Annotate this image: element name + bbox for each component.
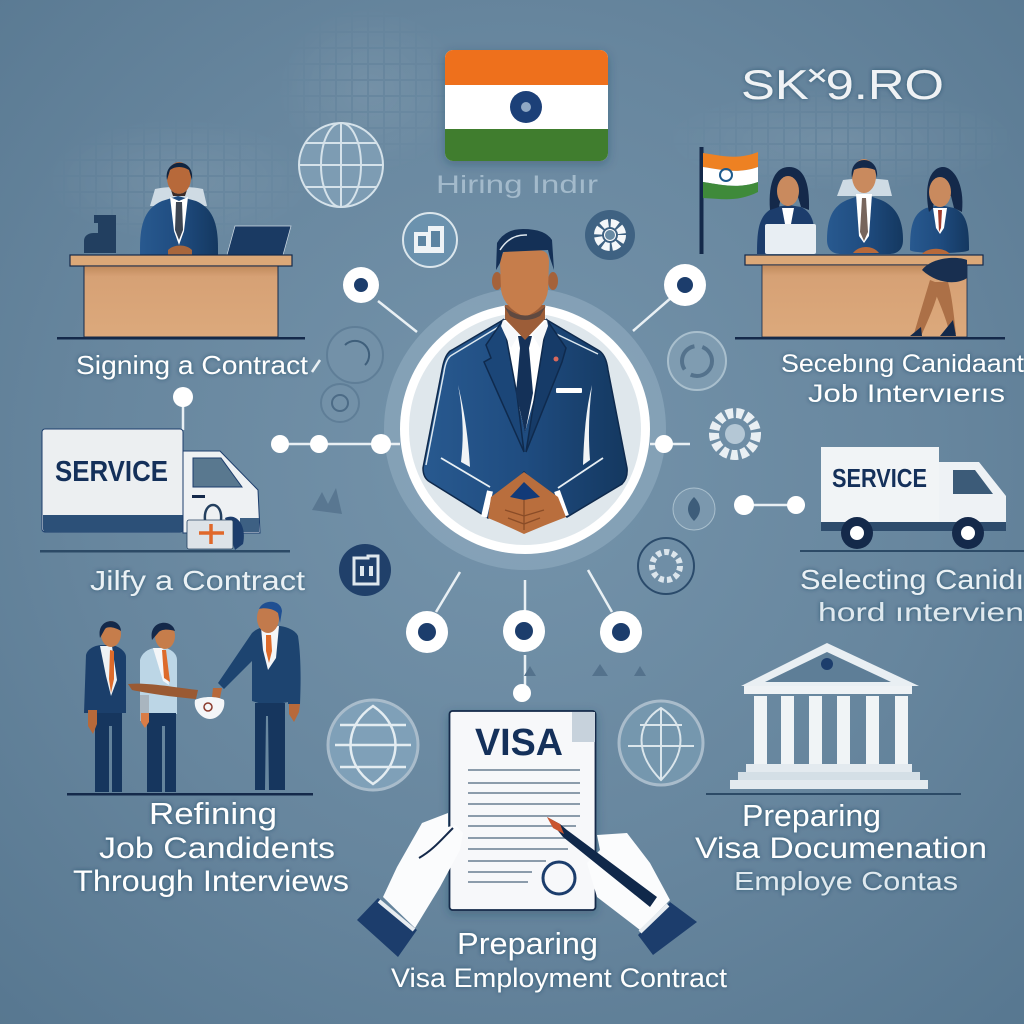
label: preparing visa contract: Visa Employment Contract — [391, 963, 728, 993]
seal — [543, 862, 575, 894]
node: small dots — [173, 387, 805, 702]
laptop — [227, 226, 291, 255]
icon: faded circles left — [321, 327, 383, 422]
label: refining job candidates: Job Candidents — [99, 832, 335, 865]
label: jilfy a contract: Jilfy a Contract — [90, 565, 305, 596]
brand logo text: SK˟9.RO — [741, 61, 944, 108]
label: selecting candidate job interviews: Job Intervıerıs — [808, 380, 1005, 408]
label: refining job candidates — [73, 796, 349, 898]
label: preparing visa contract: Preparing — [457, 926, 598, 961]
node circles — [173, 264, 805, 702]
icon: small triangles — [524, 664, 646, 676]
icon: small gear badge — [585, 210, 635, 260]
label: selecting candidate interview: Selecting Canidı — [800, 564, 1024, 595]
icon: faded glyph left — [312, 488, 342, 514]
icon: machine badge — [403, 213, 457, 267]
cuffs — [484, 491, 566, 517]
label: selecting candidate job interviews: Secebıng Canidaant — [781, 350, 1024, 378]
node: top-left ring — [343, 267, 379, 303]
icon: globe lower left — [328, 700, 418, 790]
person right — [218, 602, 301, 790]
hair — [496, 229, 554, 270]
truck label: SERVICE — [55, 456, 168, 488]
left hand — [357, 813, 463, 957]
person middle — [140, 623, 177, 792]
connectors — [183, 297, 805, 685]
illustration: government building — [706, 643, 961, 795]
illustration: handshake people — [67, 602, 313, 796]
small icons around centre — [312, 210, 756, 676]
side gaps — [458, 385, 592, 467]
small flag — [700, 147, 758, 254]
lapels — [484, 320, 524, 452]
label: preparing visa documentation — [695, 798, 987, 896]
label: selecting candidate job interviews — [781, 350, 1024, 408]
chair — [150, 187, 207, 206]
illustration: signing a contract desk — [57, 162, 305, 340]
face — [500, 250, 549, 317]
icon: flame badge — [673, 488, 715, 530]
illustration: service truck left — [40, 429, 290, 552]
illustration: visa document — [357, 711, 697, 957]
handshake — [128, 684, 198, 699]
illustration: flag and interview panel — [700, 147, 1005, 340]
icon: gear badge lower right — [638, 538, 694, 594]
central medallion — [400, 304, 650, 554]
folded corner — [572, 712, 595, 742]
central halo — [384, 288, 666, 570]
desk — [745, 255, 983, 265]
node: top-right ring — [664, 264, 706, 306]
collar — [501, 320, 548, 348]
label: refining job candidates: Refining — [149, 796, 277, 831]
lapel pin — [554, 356, 558, 362]
shirt — [503, 320, 547, 432]
icon: globe top — [299, 123, 383, 207]
shoulder highlights — [426, 326, 598, 465]
label: preparing visa documentation: Employe Contas — [734, 866, 958, 896]
desk — [70, 255, 292, 266]
seated legs — [914, 280, 956, 334]
illustration: service truck right — [800, 447, 1024, 552]
laptop — [765, 224, 816, 254]
jacket — [423, 320, 627, 518]
cab — [183, 451, 260, 533]
pocket square — [556, 388, 582, 393]
cargo box — [42, 429, 183, 532]
desk lamp / phone — [84, 215, 116, 253]
sleeve creases — [441, 458, 603, 488]
person left — [84, 621, 126, 792]
text lines — [468, 770, 580, 882]
paper — [450, 711, 596, 910]
node: lower rings — [406, 610, 642, 653]
neck — [505, 305, 545, 340]
subtitle: Hiring India: Hiring Indır — [436, 171, 598, 199]
icon: gear right — [714, 413, 756, 455]
icon: dark building badge — [339, 544, 391, 596]
visa heading: VISA — [475, 722, 563, 764]
label: preparing visa documentation: Preparing — [742, 798, 881, 833]
icon: globe lower right — [619, 701, 703, 785]
tie — [516, 336, 533, 433]
icon: India flag top — [445, 50, 608, 161]
person at desk — [140, 162, 218, 255]
label: preparing visa contract — [391, 926, 728, 993]
right hand — [587, 833, 697, 955]
label: refining job candidates: Through Interviews — [73, 865, 349, 898]
panel members — [757, 159, 969, 254]
hands — [488, 472, 566, 534]
truck label: SERVICE — [832, 463, 927, 493]
label: signing a contract: Signing a Contract — [76, 350, 309, 380]
label: selecting candidate interview — [800, 564, 1024, 627]
ears — [492, 272, 502, 290]
label: selecting candidate interview: hord ıntervien — [818, 597, 1024, 627]
label: preparing visa documentation: Visa Documenation — [695, 832, 987, 865]
bag — [187, 505, 244, 550]
icon: faded refresh right — [668, 332, 726, 390]
pen — [547, 817, 657, 907]
central person — [423, 229, 627, 534]
